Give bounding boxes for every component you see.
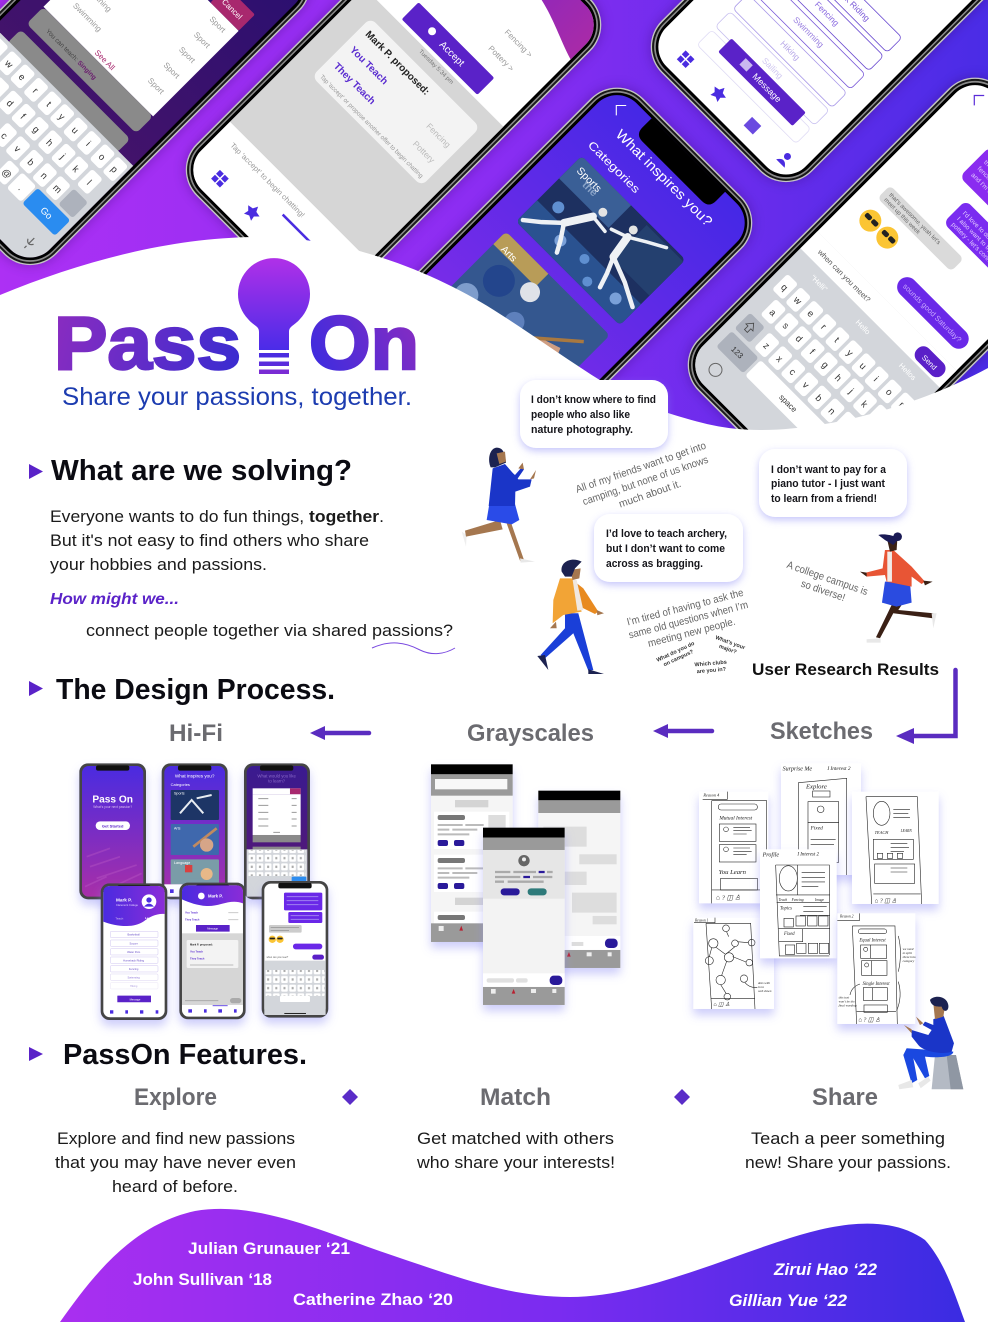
mockup: proposal: You Teach: [185, 911, 198, 915]
phone: proposal screen: Fencing: [424, 121, 453, 150]
mockup: proposal: Message: [207, 926, 219, 930]
phone: chat screen: b: [813, 393, 824, 404]
arrow: to hi-fi: [310, 726, 369, 740]
phone: proposal screen: Mark P. proposed:: [363, 29, 431, 98]
mockup: profile: Basketball: [128, 933, 140, 937]
phone: keyboard search screen: u: [69, 125, 80, 136]
mockup: categories: Arts: [174, 826, 181, 830]
phone: keyboard search screen: .: [16, 183, 25, 193]
phone: chat screen: c: [787, 367, 798, 378]
diamond divider: [674, 1089, 690, 1105]
mockup: profile: Swimming: [128, 975, 140, 979]
phone: keyboard search screen: h: [43, 138, 55, 149]
phone: keyboard search screen: Sport: [192, 30, 212, 51]
research results label: User Research Results: [752, 661, 939, 679]
phone: chat screen: u: [857, 361, 868, 372]
sketch: profile teach: ⌂ ? ◫ ♙: [875, 898, 897, 905]
sketch: search results: You Learn: [719, 869, 747, 876]
label: grayscales: Grayscales: [467, 720, 594, 747]
phone: keyboard search screen: You can teach: Singing: [44, 28, 98, 81]
phone: message screen: [635, 0, 988, 197]
phone: chat screen: n: [826, 406, 837, 417]
bubble: nature photography: people who also like: [531, 409, 630, 421]
footer wave: [60, 1209, 965, 1322]
sketch: middle profile: I Interest 2: [796, 852, 820, 857]
phone: keyboard search screen: Swimming: [71, 1, 104, 34]
phone: proposal screen: Tuesday 5:34 pm: [417, 49, 454, 86]
small question: major: major?: [718, 644, 738, 656]
diamond divider: [342, 1089, 358, 1105]
mockup: welcome: What's your next passion?: [93, 805, 132, 809]
heading: design process: The Design Process.: [56, 674, 335, 706]
mockup: profile: Mark P.: [116, 897, 132, 902]
heading: passon features: PassOn Features.: [63, 1039, 307, 1071]
sketch: interests list: [837, 913, 916, 1024]
quote: college campus: A college campus is: [785, 559, 869, 598]
problem text: Everyone wants to do fun things, together.: [50, 507, 384, 526]
phone: keyboard search screen: Sport: [208, 15, 228, 35]
phone: chat screen: 123: [729, 345, 745, 361]
quote: camping: All of my friends want to get into: [574, 440, 708, 496]
phone: chat screen: a: [767, 307, 779, 319]
feature: share: [745, 1084, 951, 1172]
phone: keyboard search screen: k: [70, 164, 81, 175]
phone: chat screen: g: [819, 360, 831, 371]
mockup: proposal: [179, 883, 246, 1019]
sketch: search results: [699, 792, 768, 903]
quote: same old questions: [624, 586, 753, 654]
sketch: explore: [781, 763, 861, 875]
phone: chat screen: t: [832, 335, 841, 345]
sketch: interests list: category: [903, 959, 915, 963]
logo: Pass: [54, 301, 241, 385]
section marker: solving: [29, 464, 43, 479]
mockup: profile: Learn: [145, 916, 153, 920]
phone: chat screen: q: [778, 282, 790, 294]
person: man in orange hoodie: [537, 560, 604, 674]
feature: explore: heard of before.: [112, 1177, 238, 1196]
mockup: profile: Hiking: [130, 984, 138, 988]
feature: share: Share: [812, 1084, 878, 1111]
heading: what are we solving: What are we solving?: [51, 455, 352, 487]
phone: chat screen: i: [871, 375, 880, 384]
person: woman in blue sweater: [462, 448, 536, 563]
mockup: proposal: They Teach: [190, 956, 205, 960]
sketch: network map: ⌂ ◫ ♙: [713, 1001, 730, 1008]
phone: chat screen: f: [807, 347, 817, 357]
phone: keyboard search screen: r: [30, 86, 40, 96]
phone: chat screen: v: [800, 380, 811, 391]
mockup: proposal: You Teach: [190, 949, 203, 953]
mockup: profile: Claremont College: [116, 903, 139, 907]
sketch: interests list: we need: [903, 947, 914, 951]
phone: chat screen: h: [832, 373, 844, 384]
sketch: explore: Explore: [805, 784, 827, 791]
hi-fi phone mockups: [79, 763, 328, 1020]
bubble: nature photography: [520, 380, 668, 448]
arrow: research to sketches: [896, 670, 956, 744]
sketch: middle profile: [760, 849, 837, 958]
wireframe: proposal: [483, 828, 565, 1005]
bubble: piano tutor: I don’t want to pay for a: [771, 464, 887, 476]
phone: proposal screen: They Teach: [331, 61, 377, 107]
sketch: interests list: this text: [839, 995, 849, 999]
phone: message screen: Sailing: [760, 55, 785, 81]
phone: proposal screen: Tap 'accept' to begin chatting!: [228, 141, 307, 219]
phone: what inspires you screen: the: [580, 179, 600, 199]
squiggle underline: [372, 643, 455, 654]
label: sketches: Sketches: [770, 718, 873, 745]
mockup: categories: What inspires you?: [175, 773, 215, 778]
small question: major: [712, 635, 747, 658]
team names: John Sullivan ‘18: [133, 1271, 272, 1289]
small question: what do you do: What do you do: [656, 641, 696, 664]
sketch: profile teach: [852, 792, 939, 905]
phone: keyboard search screen: i: [83, 139, 93, 149]
logo: [54, 258, 419, 385]
sketch: interests list: ⌂ ? ◫ ♙: [858, 1017, 880, 1024]
feature: share: Teach a peer something: [751, 1129, 945, 1148]
quote: camping: camping, but none of us knows: [581, 454, 710, 508]
team names: Julian Grunauer ‘21: [188, 1240, 350, 1258]
phone: what inspires you screen: Categories: [585, 139, 642, 196]
phone: message screen: Message: [750, 71, 783, 104]
phone: keyboard search screen: Sport: [177, 45, 198, 65]
feature: share: new! Share your passions.: [745, 1153, 951, 1172]
section marker: design process: [29, 681, 43, 696]
mockup: chat: [262, 881, 328, 1018]
phone: chat screen: d: [793, 333, 804, 345]
small question: what do you do: on campus?: [663, 649, 695, 668]
phone: proposal screen: Pottery >: [487, 44, 516, 73]
phone: proposal screen: Fencing >: [503, 28, 534, 59]
mockup: learn search: [244, 763, 310, 899]
mockup: profile: Horseback Riding: [123, 958, 145, 962]
small question: clubs: Which clubs: [694, 660, 727, 668]
mockup: learn search: to learn?: [268, 779, 286, 784]
feature: match: who share your interests!: [416, 1153, 615, 1172]
wireframe: chat: [538, 791, 620, 968]
sketch: middle profile: Topics: [780, 906, 792, 911]
phone: proposal screen: Tap 'accept' or propose another offer to begin chatting: [318, 74, 425, 180]
feature: explore: [55, 1084, 296, 1196]
phone: keyboard search screen: [0, 0, 326, 280]
phone: keyboard search screen: t: [44, 100, 54, 109]
section marker: features: [29, 1047, 43, 1061]
phone: chat screen: Send: [920, 353, 939, 372]
phone: chat screen: when can you meet?: [815, 247, 872, 304]
phone: keyboard search screen: f: [18, 112, 28, 122]
phone: chat screen: space: [777, 393, 799, 415]
sketch: interests list: Equal Interest: [858, 939, 886, 944]
phone: keyboard search screen: m: [50, 183, 64, 196]
feature: explore: Explore and find new passions: [57, 1129, 295, 1148]
arrow: to grayscales: [653, 724, 712, 738]
quote: college campus: so diverse!: [799, 578, 847, 604]
feature: explore: Explore: [134, 1084, 217, 1111]
phone: chat screen: r: [818, 322, 828, 332]
phone: chat screen: meet up this week: [882, 197, 922, 236]
mockup: profile: Fencing: [129, 967, 139, 971]
phone: message screen: Swimming: [791, 15, 826, 50]
phone: keyboard search screen: e: [16, 72, 27, 83]
phone: chat screen: z: [760, 341, 772, 352]
phone: chat screen: s: [780, 320, 791, 332]
phone: keyboard search screen: l: [84, 178, 93, 188]
quote: same old questions: I’m tired of having to ask the: [626, 587, 745, 628]
phone: keyboard search screen: j: [57, 151, 67, 161]
team names: Zirui Hao ‘22: [773, 1261, 877, 1279]
phone: what inspires you screen: Sports: [574, 165, 604, 195]
mockup: profile: [101, 883, 167, 1020]
phone: keyboard search screen: p: [108, 164, 120, 176]
sketch: network map: in to: [758, 985, 764, 989]
mockup: welcome: Pass On: [92, 795, 133, 806]
sketch: interests list: won't be the: [839, 999, 855, 1003]
phone: keyboard search screen: y: [56, 112, 67, 123]
sketch: network map: Reason 1: [694, 919, 709, 923]
grayscale wireframes: [431, 764, 620, 1005]
sketch: middle profile: Teach: [779, 898, 787, 902]
mockup: proposal: Mark P.: [208, 894, 223, 899]
bubble: nature photography: I don’t know where to find: [531, 394, 656, 406]
sketch: interests list: final wording: [839, 1003, 857, 1007]
mockup: proposal: They Teach: [185, 918, 200, 922]
bubble: piano tutor: [759, 449, 907, 517]
mockup: profile: Soccer: [130, 941, 138, 945]
phone: message screen: Hiking: [778, 38, 802, 62]
phone: chat screen: m: [838, 418, 851, 431]
quote: same old questions: same old questions when I’m: [627, 599, 750, 641]
problem text: [50, 507, 384, 574]
sketch: network map: web down: [758, 989, 772, 993]
phone: chat screen: that's awesome, yeah let's: [887, 192, 941, 246]
sketch: explore: Fixed: [810, 825, 823, 831]
phone: proposal screen: Pottery: [411, 139, 437, 165]
tagline: Share your passions, together.: [62, 383, 412, 411]
bubble: piano tutor: to learn from a friend!: [771, 493, 877, 505]
phone: keyboard search screen: Sport: [146, 76, 166, 97]
phone: chat screen: e: [804, 308, 816, 320]
sketch: interests list: to split: [903, 951, 912, 955]
feature: match: Get matched with others: [417, 1129, 614, 1148]
phone: proposal screen: [180, 0, 606, 260]
quote: same old questions: meeting new people.: [647, 616, 737, 650]
person: seated man: [898, 997, 963, 1089]
phone: proposal screen: You Teach: [347, 45, 390, 87]
phone: what inspires you screen: Arts: [498, 244, 519, 264]
phone: keyboard search screen: Sport: [162, 61, 182, 81]
phone: chat screen: sounds good Saturday?: [901, 282, 963, 344]
sketch: profile teach: TEACH: [875, 830, 889, 835]
team names: Gillian Yue ‘22: [729, 1292, 847, 1310]
sketch: middle profile: Fencing: [791, 898, 804, 902]
bubble: archery: across as bragging.: [606, 558, 703, 570]
bubble: archery: I’d love to teach archery,: [606, 528, 727, 540]
mockup: chat: when can you meet?: [267, 956, 289, 959]
phone: keyboard search screen: g: [30, 124, 41, 136]
phone: message screen: Fencing: [813, 0, 841, 28]
problem text: your hobbies and passions.: [50, 555, 267, 574]
sketch: middle profile: Fixed: [783, 932, 795, 937]
phone: keyboard search screen: d: [4, 98, 15, 109]
phone: chat screen: l: [872, 413, 882, 422]
logo: On: [309, 301, 419, 385]
phone: chat screen: j: [846, 386, 856, 396]
sketch: search results: ⌂ ? ◫ ♙: [716, 894, 741, 901]
phone: keyboard search screen: Go: [38, 205, 54, 222]
sketch: search results: Reason 4: [702, 793, 720, 798]
feature: explore: that you may have never even: [55, 1153, 296, 1172]
bubble: nature photography: nature photography.: [531, 424, 633, 436]
mockup: profile: Teach: [115, 916, 124, 920]
sketch: interests list: these into: [903, 955, 916, 959]
bubble: piano tutor: piano tutor - I just want: [771, 478, 885, 490]
phone: proposal screen: Accept: [437, 40, 466, 69]
mockup: categories: Language: [174, 861, 190, 865]
phone: keyboard search screen: n: [38, 170, 50, 182]
phone: keyboard search screen: o: [96, 152, 107, 163]
label: hi-fi: Hi-Fi: [169, 720, 223, 747]
phone: chat screen: Hellos: [897, 361, 918, 382]
mockup: proposal: Mark P. proposed:: [190, 942, 213, 946]
phone: chat screen: Hello: [854, 318, 872, 336]
problem text: But it's not easy to find others who share: [50, 531, 369, 550]
mockup: profile: Water Polo: [127, 950, 141, 954]
mockup: categories: Categories: [171, 782, 190, 787]
bubble: archery: [594, 514, 743, 582]
small question: clubs: [694, 660, 728, 675]
mockup: profile: Message: [130, 997, 141, 1001]
phone: what inspires you screen: What inspires you?: [613, 126, 716, 229]
phone: chat screen: p: [896, 400, 908, 411]
sketch: network map: dots with: [758, 981, 770, 985]
sketch: explore: Surprise Me: [783, 767, 812, 773]
sketch: search results: Mutual Interest: [718, 815, 753, 821]
person: woman in red jacket: [860, 532, 937, 643]
mockup: welcome: [79, 763, 146, 899]
quote: camping: [574, 440, 717, 522]
phone: chat screen: x: [774, 354, 785, 365]
phone: what inspires you screen: [412, 82, 758, 380]
phone: keyboard search screen: b: [25, 157, 36, 168]
mockup: welcome: Get Started: [102, 823, 124, 828]
sketch wireframes: [693, 763, 939, 1024]
sketch: interests list: Single Interest: [863, 982, 890, 987]
small question: clubs: are you in?: [696, 667, 727, 675]
phone: chat screen: y: [844, 348, 855, 359]
quote: camping: much about it.: [617, 478, 683, 510]
sketch: middle profile: Profile: [762, 852, 779, 859]
sketch: explore: I Interest 2: [826, 766, 851, 772]
wireframe: search list: [431, 764, 513, 942]
sketch: middle profile: Image: [814, 898, 825, 902]
team names: Catherine Zhao ‘20: [293, 1291, 453, 1309]
sketch: profile teach: LEARN: [900, 829, 912, 833]
feature: match: [416, 1084, 615, 1172]
small question: major: What’s your: [714, 635, 747, 652]
mockup: categories: Sports: [174, 791, 185, 795]
phone: chat screen: [682, 72, 988, 430]
phone: chat screen: o: [883, 387, 894, 398]
bubble: archery: but I don’t want to come: [606, 543, 725, 555]
phone: chat screen: w: [790, 294, 804, 307]
phone: chat screen: k: [858, 399, 870, 410]
answer text: connect people together via shared passions?: [86, 621, 453, 640]
how might we: How might we...: [50, 591, 179, 608]
mockup: categories: [162, 763, 228, 899]
feature: match: Match: [480, 1084, 551, 1111]
mockup: learn search: What would you like: [257, 773, 296, 778]
sketch: network map: [693, 918, 774, 1009]
header background: [0, 0, 988, 440]
phone: keyboard search screen: See All: [93, 48, 117, 72]
phone: keyboard search screen: v: [11, 144, 23, 155]
phone: keyboard search screen: w: [1, 57, 15, 71]
team names: [133, 1240, 877, 1310]
phone: chat screen: "Helli": [809, 273, 830, 294]
sketch: interests list: Reason 2: [839, 914, 854, 918]
